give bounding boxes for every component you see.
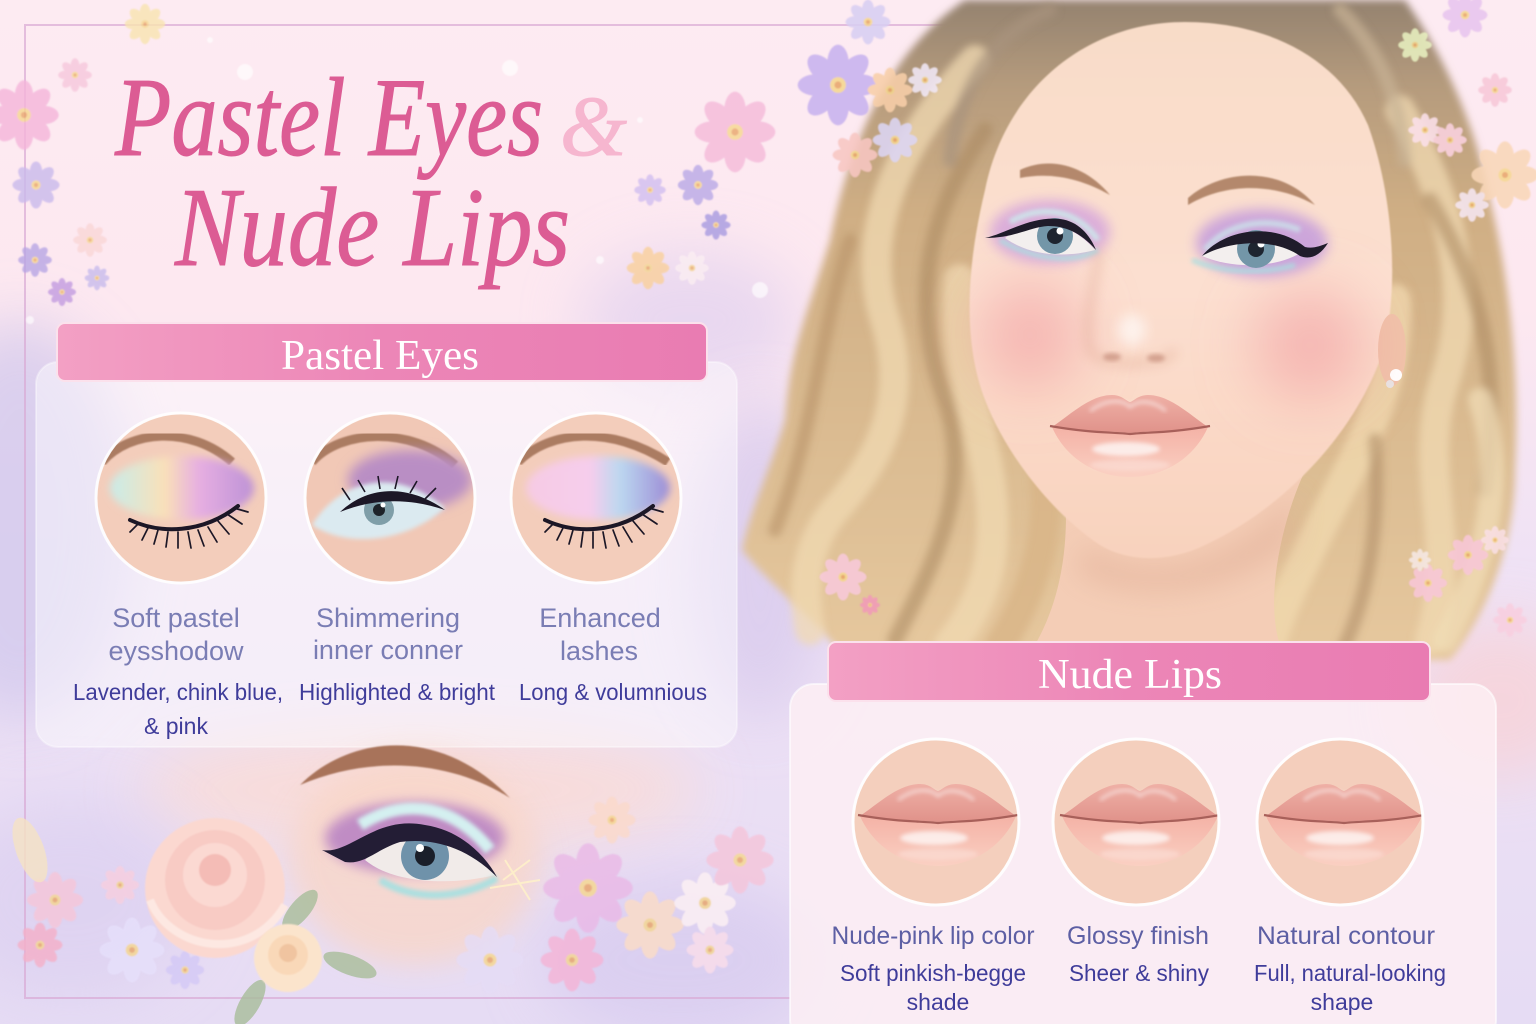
label: shimmering inner corner: Shimmering [316, 603, 460, 633]
label: natural contour: Full, natural-looking [1254, 960, 1446, 986]
label: enhanced lashes [519, 603, 707, 705]
flowers around portrait [798, 0, 1536, 637]
circle outlines [96, 413, 681, 583]
label: natural contour: shape [1311, 989, 1373, 1015]
large eye illustration [290, 745, 540, 965]
lips 3: natural contour [1254, 740, 1426, 906]
heading banner: Nude Lips [828, 642, 1430, 701]
heading banner: Pastel Eyes: Pastel Eyes [281, 333, 479, 379]
bottom left floral scene [5, 745, 774, 1024]
lips 2: glossy finish [1050, 740, 1222, 906]
eye 2: shimmering inner corner [305, 413, 475, 583]
label: natural contour [1254, 922, 1446, 1015]
label: nude-pink lip color [832, 922, 1034, 1015]
label: glossy finish: Sheer & shiny [1069, 960, 1209, 986]
panel background [36, 362, 737, 747]
blush [980, 280, 1365, 400]
label: shimmering inner corner [299, 603, 496, 705]
title line 1: Pastel Eyes [114, 56, 543, 180]
circle outlines [853, 739, 1423, 905]
right eye [1192, 209, 1328, 277]
leaves [5, 813, 380, 1024]
hair strands [775, 10, 1492, 645]
label: glossy finish: Glossy finish [1067, 922, 1209, 950]
label: soft pastel eyeshadow: eysshodow [108, 636, 244, 666]
label: shimmering inner corner: Highlighted & bright [299, 679, 496, 705]
rose [145, 818, 285, 958]
label: enhanced lashes: Enhanced [539, 603, 661, 633]
label: enhanced lashes: lashes [560, 636, 638, 666]
label: shimmering inner corner: inner conner [313, 635, 463, 665]
neck [1035, 460, 1310, 645]
nose [1088, 250, 1175, 364]
label: nude-pink lip color: Nude-pink lip color [832, 922, 1034, 950]
flowers [18, 796, 774, 994]
panel background [790, 684, 1496, 1024]
panel: Pastel Eyes [36, 323, 737, 747]
label: natural contour: Natural contour [1257, 922, 1435, 950]
label: glossy finish [1067, 922, 1209, 986]
title line 2: Nude Lips [174, 166, 570, 290]
label: nude-pink lip color: shade [907, 989, 969, 1015]
heading banner: Nude Lips: Nude Lips [1038, 652, 1222, 698]
label: soft pastel eyeshadow: & pink [144, 713, 208, 739]
label: soft pastel eyeshadow [73, 603, 283, 739]
ear and earring [1378, 314, 1406, 388]
hair back [742, 0, 1516, 660]
label: nude-pink lip color: Soft pinkish-begge [840, 960, 1026, 986]
mouth [1050, 395, 1210, 477]
heading banner: Pastel Eyes [57, 323, 707, 381]
small rose [254, 924, 322, 992]
eye 3: enhanced lashes [511, 413, 681, 583]
lips 1: nude-pink lip color [850, 740, 1022, 906]
eye 1: soft pastel eyeshadow [96, 413, 266, 583]
left eye [985, 200, 1110, 264]
title [114, 56, 627, 290]
ampersand: & [560, 78, 627, 174]
flowers top-left and title surround [0, 4, 775, 324]
decorative frame [25, 25, 960, 998]
label: soft pastel eyeshadow: Soft pastel [112, 603, 240, 633]
label: enhanced lashes: Long & volumnious [519, 679, 707, 705]
panel: Nude Lips [790, 642, 1496, 1024]
label: soft pastel eyeshadow: Lavender, chink blue, [73, 679, 283, 705]
face [970, 22, 1392, 558]
eyebrows [1020, 164, 1315, 205]
portrait: woman with wavy blonde hair [742, 0, 1516, 660]
